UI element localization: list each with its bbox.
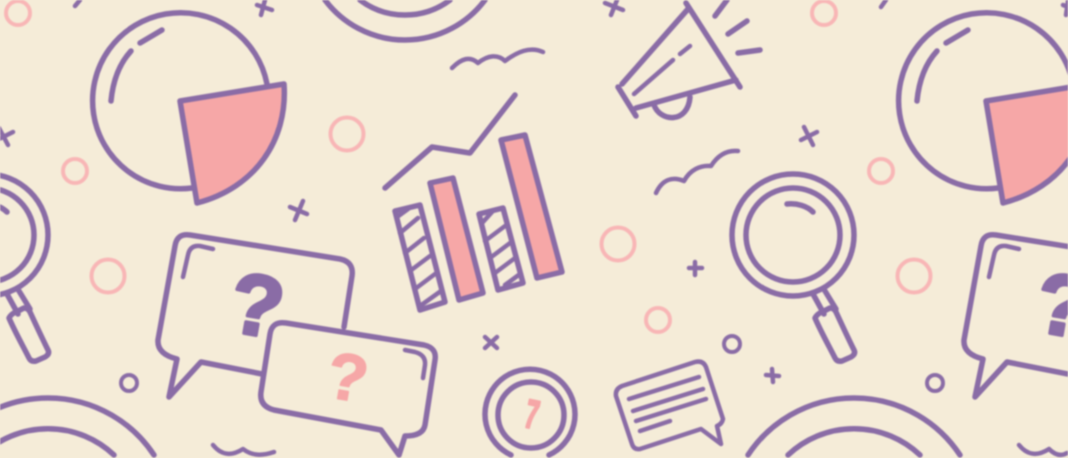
bar: striped 3 xyxy=(479,208,523,290)
icon: top target rings xyxy=(325,0,485,40)
bar: striped 1 xyxy=(395,205,445,310)
icon: line trend xyxy=(385,95,515,188)
icon: bottom arcs left xyxy=(0,398,154,455)
wave: bottom repeat xyxy=(1019,445,1067,455)
purple small rings xyxy=(121,336,943,391)
icon: bottom arcs right xyxy=(748,398,960,455)
icon: magnifier xyxy=(732,174,855,361)
bar: pink 2 xyxy=(430,178,483,300)
wave: top xyxy=(452,50,543,68)
icon: chat note xyxy=(616,362,723,449)
question mark: ? xyxy=(321,337,374,417)
icon: pie chart xyxy=(93,13,284,203)
icon: megaphone xyxy=(618,0,760,118)
icon: question bubble repeat xyxy=(964,235,1068,397)
wave: right xyxy=(656,151,738,193)
icon: pie chart repeat xyxy=(899,13,1068,203)
icon: question bubble small xyxy=(261,323,435,455)
wave: bottom xyxy=(213,445,274,455)
icon: question bubble large xyxy=(158,235,352,397)
bar: pink 4 xyxy=(501,135,562,278)
question mark: ? xyxy=(223,254,291,358)
icon: numbered coin xyxy=(485,369,575,455)
bar chart xyxy=(395,135,562,310)
icon: numbered coin: 7 xyxy=(521,392,543,438)
pink rings xyxy=(6,1,930,332)
icon: magnifier repeat xyxy=(0,174,49,361)
